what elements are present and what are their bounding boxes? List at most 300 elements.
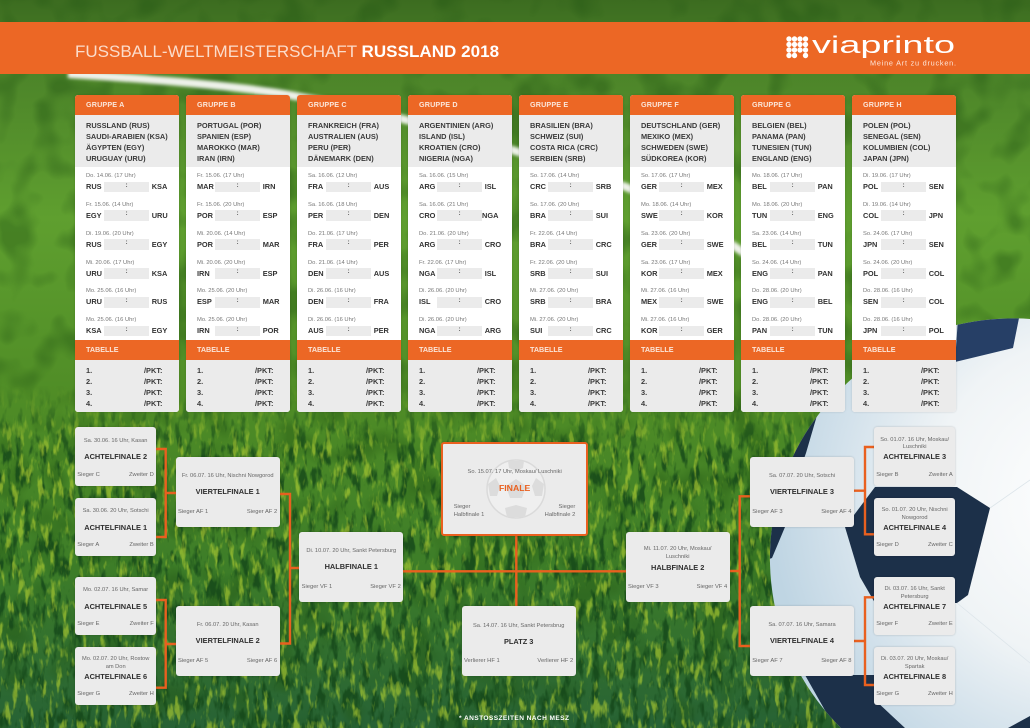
team list A: URUGUAY (URU) bbox=[86, 154, 146, 162]
panel: Gruppe C bbox=[297, 95, 401, 412]
table heading F bbox=[630, 340, 734, 360]
matches B bbox=[197, 173, 280, 336]
matches B: ESP bbox=[197, 297, 212, 306]
connector: AF2 and AF1 to VF1 bbox=[156, 449, 176, 537]
matches G: PAN bbox=[818, 268, 833, 278]
table F: /PKT: bbox=[699, 398, 717, 408]
card: Achtelfinale 8: Zweiter H bbox=[928, 691, 953, 697]
matches F: : bbox=[681, 269, 683, 275]
card: Achtelfinale 4 bbox=[874, 498, 955, 556]
team list F bbox=[630, 115, 734, 167]
team list B: SPANIEN (ESP) bbox=[197, 132, 251, 140]
table A bbox=[75, 360, 179, 412]
card: Finale bbox=[441, 442, 588, 536]
matches H: POL bbox=[929, 326, 944, 335]
team list E bbox=[519, 115, 623, 167]
team list E: SERBIEN (SRB) bbox=[530, 154, 585, 162]
matches C: PER bbox=[374, 326, 389, 335]
matches E bbox=[530, 173, 612, 336]
matches D bbox=[419, 173, 501, 336]
team list H: KOLUMBIEN (COL) bbox=[863, 142, 930, 152]
card: Achtelfinale 8: Sieger G bbox=[876, 691, 899, 697]
table F: 3. bbox=[641, 388, 647, 396]
matches F: Sa. 23.06. (17 Uhr) bbox=[641, 260, 690, 266]
team list A: RUSSLAND (RUS) bbox=[86, 120, 150, 130]
matches E: SUI bbox=[596, 211, 608, 220]
matches C: FRA bbox=[308, 182, 323, 191]
matches C: Di. 26.06. (16 Uhr) bbox=[308, 317, 356, 323]
team list H: JAPAN (JPN) bbox=[863, 154, 909, 162]
matches A: Mo. 25.06. (16 Uhr) bbox=[86, 288, 136, 294]
matches G: : bbox=[792, 269, 794, 275]
matches B: IRN bbox=[197, 268, 210, 278]
card: Platz 3: Verlierer HF 1 bbox=[464, 658, 500, 664]
matches F: GER bbox=[641, 182, 657, 191]
matches F: Mi. 27.06. (16 Uhr) bbox=[641, 317, 689, 323]
table heading H bbox=[852, 340, 956, 360]
connector: HF1 and HF2 with final and third place bbox=[403, 535, 626, 607]
matches H: : bbox=[903, 211, 905, 217]
heading: Gruppe A: GRUPPE A bbox=[86, 100, 124, 109]
matches C: Sa. 16.06. (12 Uhr) bbox=[308, 173, 357, 179]
logo: viaprinto: Meine Art zu drucken. bbox=[870, 58, 956, 68]
table E: 4. bbox=[530, 398, 536, 408]
matches H: So. 24.06. (17 Uhr) bbox=[863, 231, 912, 237]
matches E: : bbox=[570, 298, 572, 304]
card: Viertelfinale 2: Sieger AF 6 bbox=[247, 658, 277, 664]
heading: Gruppe G: GRUPPE G bbox=[752, 100, 791, 109]
table G: /PKT: bbox=[810, 366, 828, 374]
matches D: Di. 26.06. (20 Uhr) bbox=[419, 317, 467, 323]
matches H: COL bbox=[863, 211, 879, 220]
matches F: KOR bbox=[641, 268, 657, 278]
matches A: Mo. 25.06. (16 Uhr) bbox=[86, 317, 136, 323]
matches G: BEL bbox=[818, 297, 832, 306]
matches B: : bbox=[237, 183, 239, 189]
table G: /PKT: bbox=[810, 388, 828, 396]
table heading B bbox=[186, 340, 290, 360]
matches D: ISL bbox=[419, 297, 430, 306]
matches G: : bbox=[792, 183, 794, 189]
table E: 3. bbox=[530, 388, 536, 396]
matches H: : bbox=[903, 298, 905, 304]
team list E: SCHWEIZ (SUI) bbox=[530, 132, 583, 140]
team list F: MEXIKO (MEX) bbox=[641, 132, 693, 140]
matches E: : bbox=[570, 183, 572, 189]
matches E: Mi. 27.06. (20 Uhr) bbox=[530, 317, 578, 323]
table heading G bbox=[741, 340, 845, 360]
matches B: Mi. 20.06. (20 Uhr) bbox=[197, 260, 245, 266]
matches A: : bbox=[126, 327, 128, 333]
matches E: SRB bbox=[530, 297, 546, 306]
team list G: ENGLAND (ENG) bbox=[752, 154, 812, 162]
team list H: POLEN (POL) bbox=[863, 120, 911, 130]
matches B: Fr. 15.06. (20 Uhr) bbox=[197, 202, 244, 208]
card: Achtelfinale 2: ACHTELFINALE 2 bbox=[84, 452, 147, 461]
matches A: : bbox=[126, 298, 128, 304]
matches A: RUS bbox=[152, 297, 167, 306]
card: Achtelfinale 5: Mo. 02.07. 16 Uhr, Samar bbox=[83, 587, 148, 593]
card: Halbfinale 1 bbox=[299, 532, 403, 602]
card: Platz 3: Sa. 14.07. 16 Uhr, Sankt Petersbrug bbox=[473, 623, 564, 629]
heading: Gruppe D bbox=[408, 95, 512, 115]
card: Achtelfinale 4: Nowgorod bbox=[902, 515, 928, 521]
matches A: URU bbox=[152, 211, 168, 220]
heading: Gruppe F: GRUPPE F bbox=[641, 100, 679, 109]
matches G: PAN bbox=[818, 182, 833, 191]
team list B: PORTUGAL (POR) bbox=[197, 120, 261, 130]
matches A: URU bbox=[86, 297, 102, 306]
heading: Gruppe H: GRUPPE H bbox=[863, 100, 902, 109]
matches C: Di. 26.06. (16 Uhr) bbox=[308, 288, 356, 294]
matches G: BEL bbox=[752, 182, 767, 191]
matches G: : bbox=[792, 298, 794, 304]
card: Achtelfinale 6: Zweiter H bbox=[129, 691, 154, 697]
matches B: : bbox=[237, 211, 239, 217]
card: Achtelfinale 4: So. 01.07. 20 Uhr, Nischni bbox=[882, 507, 948, 513]
card: Achtelfinale 7: Zweiter E bbox=[928, 621, 953, 627]
matches G: BEL bbox=[752, 240, 767, 249]
matches D: ISL bbox=[485, 182, 496, 191]
table H: 4. bbox=[863, 398, 869, 408]
card: Achtelfinale 8: Di. 03.07. 20 Uhr, Moskau/ bbox=[881, 656, 948, 662]
table H: /PKT: bbox=[921, 398, 939, 408]
matches F: : bbox=[681, 240, 683, 246]
matches E: Mi. 27.06. (20 Uhr) bbox=[530, 288, 578, 294]
matches C: PER bbox=[308, 211, 323, 220]
matches A: Mi. 20.06. (17 Uhr) bbox=[86, 260, 134, 266]
table heading A bbox=[75, 340, 179, 360]
matches F: So. 17.06. (17 Uhr) bbox=[641, 173, 690, 179]
table F: 4. bbox=[641, 398, 647, 408]
matches H: POL bbox=[863, 182, 878, 191]
table heading D: TABELLE bbox=[419, 345, 452, 354]
matches C: DEN bbox=[308, 268, 324, 278]
matches B: : bbox=[237, 298, 239, 304]
card: Achtelfinale 4: Zweiter C bbox=[928, 542, 953, 548]
matches G: PAN bbox=[752, 326, 767, 335]
matches E: BRA bbox=[530, 240, 546, 249]
matches F: GER bbox=[641, 240, 657, 249]
table E bbox=[519, 360, 623, 412]
table A: 1. bbox=[86, 366, 92, 374]
card: Viertelfinale 2: Sieger AF 5 bbox=[178, 658, 208, 664]
matches B: MAR bbox=[263, 240, 280, 249]
heading: Gruppe A bbox=[75, 95, 179, 115]
table C: 4. bbox=[308, 398, 314, 408]
card: Achtelfinale 6: Sieger G bbox=[77, 691, 100, 697]
matches G bbox=[752, 173, 834, 336]
matches B: ESP bbox=[263, 211, 277, 220]
card: Viertelfinale 3 bbox=[750, 457, 854, 527]
matches H: : bbox=[903, 183, 905, 189]
connector: VF3 and VF4 to HF2 bbox=[730, 496, 750, 646]
table C: 3. bbox=[308, 388, 314, 396]
matches H: Di. 19.06. (14 Uhr) bbox=[863, 202, 911, 208]
table G: 3. bbox=[752, 388, 758, 396]
matches G: : bbox=[792, 327, 794, 333]
matches F: Mo. 18.06. (14 Uhr) bbox=[641, 202, 691, 208]
card: Achtelfinale 7 bbox=[874, 577, 955, 635]
team list C: AUSTRALIEN (AUS) bbox=[308, 132, 378, 140]
logo: viaprinto bbox=[786, 32, 956, 68]
card: Achtelfinale 2: Sieger C bbox=[77, 472, 100, 478]
matches H: SEN bbox=[929, 240, 944, 249]
matches E: SUI bbox=[596, 268, 608, 278]
matches F bbox=[641, 173, 724, 336]
heading: Gruppe C bbox=[297, 95, 401, 115]
card: Achtelfinale 7: Sieger F bbox=[876, 621, 898, 627]
card: Achtelfinale 6 bbox=[75, 647, 156, 705]
matches E: CRC bbox=[596, 240, 612, 249]
team list C bbox=[297, 115, 401, 167]
card: Viertelfinale 1: Fr. 06.07. 16 Uhr, Nischni Nowgorod bbox=[182, 473, 274, 479]
matches F: MEX bbox=[641, 297, 657, 306]
card: Platz 3: PLATZ 3 bbox=[504, 637, 533, 646]
panel: Gruppe B bbox=[186, 95, 290, 412]
card: Viertelfinale 2: Fr. 06.07. 20 Uhr, Kasan bbox=[197, 622, 259, 628]
matches D: : bbox=[459, 211, 461, 217]
table D: /PKT: bbox=[477, 388, 495, 396]
heading: Gruppe C: GRUPPE C bbox=[308, 100, 347, 109]
team list D bbox=[408, 115, 512, 167]
matches C: FRA bbox=[374, 297, 389, 306]
table H: 1. bbox=[863, 366, 869, 374]
matches B: IRN bbox=[263, 182, 275, 191]
matches F: : bbox=[681, 298, 683, 304]
table A: 3. bbox=[86, 388, 92, 396]
team list D: ISLAND (ISL) bbox=[419, 132, 465, 140]
matches D: : bbox=[459, 269, 461, 275]
table A: /PKT: bbox=[144, 388, 162, 396]
matches A: RUS bbox=[86, 240, 102, 249]
card: Halbfinale 2: Mi. 11.07. 20 Uhr, Moskau/ bbox=[644, 546, 711, 552]
card: Achtelfinale 6: ACHTELFINALE 6 bbox=[84, 672, 147, 681]
finale right team bbox=[545, 504, 576, 518]
table H bbox=[852, 360, 956, 412]
matches G: Mo. 18.06. (20 Uhr) bbox=[752, 202, 802, 208]
matches E: BRA bbox=[596, 297, 612, 306]
matches E: So. 17.06. (20 Uhr) bbox=[530, 202, 579, 208]
table F: /PKT: bbox=[699, 366, 717, 374]
table D: 1. bbox=[419, 366, 425, 374]
matches H: JPN bbox=[863, 326, 877, 335]
panel: Gruppe H bbox=[852, 95, 956, 412]
connector: VF1 and VF2 to HF1 bbox=[279, 494, 300, 644]
card: Achtelfinale 3: Luschniki bbox=[903, 444, 926, 450]
team list E: BRASILIEN (BRA) bbox=[530, 120, 593, 130]
team list G bbox=[741, 115, 845, 167]
matches E: CRC bbox=[596, 326, 612, 335]
card: Viertelfinale 3: Sieger AF 4 bbox=[821, 509, 852, 515]
matches G: ENG bbox=[752, 297, 768, 306]
table E: /PKT: bbox=[588, 388, 606, 396]
card: Halbfinale 2: Sieger VF 4 bbox=[697, 584, 727, 590]
matches F: MEX bbox=[707, 268, 723, 278]
matches E: SRB bbox=[596, 182, 611, 191]
matches E: SRB bbox=[530, 268, 546, 278]
matches F: Sa. 23.06. (20 Uhr) bbox=[641, 231, 690, 237]
card: Platz 3 bbox=[462, 606, 576, 676]
matches D: Sa. 16.06. (21 Uhr) bbox=[419, 202, 468, 208]
panel: Gruppe A bbox=[75, 95, 179, 412]
table heading G: TABELLE bbox=[752, 345, 785, 354]
table E: /PKT: bbox=[588, 366, 606, 374]
footnote: * ANSTOSSZEITEN NACH MESZ bbox=[459, 715, 569, 722]
matches H: Di. 19.06. (17 Uhr) bbox=[863, 173, 911, 179]
card: Achtelfinale 2 bbox=[75, 427, 156, 486]
team list H: SENEGAL (SEN) bbox=[863, 132, 921, 140]
card: Achtelfinale 7: Petersburg bbox=[901, 594, 929, 600]
team list D: NIGERIA (NGA) bbox=[419, 154, 473, 162]
card: Halbfinale 2: Luschniki bbox=[666, 554, 690, 560]
matches C: PER bbox=[374, 240, 389, 249]
panel: Gruppe F bbox=[630, 95, 734, 412]
matches G: TUN bbox=[818, 326, 833, 335]
card: Viertelfinale 1 bbox=[176, 457, 280, 527]
matches C: AUS bbox=[374, 268, 389, 278]
heading: Gruppe F bbox=[630, 95, 734, 115]
table H: /PKT: bbox=[921, 376, 939, 386]
connector: AF3 and AF4 to VF3 bbox=[854, 447, 874, 534]
finale date: So. 15.07. 17 Uhr, Moskau/ Luschniki bbox=[468, 469, 562, 475]
team list F: SÜDKOREA (KOR) bbox=[641, 154, 706, 162]
matches C: : bbox=[348, 183, 350, 189]
table G: 1. bbox=[752, 366, 758, 374]
team list A: ÄGYPTEN (EGY) bbox=[86, 142, 144, 152]
title: FUSSBALL-WELTMEISTERSCHAFT RUSSLAND 2018 bbox=[75, 42, 499, 61]
matches E: Fr. 22.06. (14 Uhr) bbox=[530, 231, 577, 237]
finale left team bbox=[454, 504, 484, 518]
card: Viertelfinale 2: VIERTELFINALE 2 bbox=[196, 636, 260, 645]
table E: 2. bbox=[530, 376, 536, 386]
card: Achtelfinale 5: Sieger E bbox=[77, 621, 100, 627]
table H: 2. bbox=[863, 376, 869, 386]
matches A: KSA bbox=[86, 326, 102, 335]
card: Achtelfinale 6: Mo. 02.07. 20 Uhr, Rostow bbox=[82, 656, 149, 662]
table A: /PKT: bbox=[144, 376, 162, 386]
matches A: : bbox=[126, 240, 128, 246]
matches G: TUN bbox=[752, 211, 767, 220]
matches D: ISL bbox=[485, 268, 496, 278]
table F bbox=[630, 360, 734, 412]
heading: Gruppe G bbox=[741, 95, 845, 115]
finale left team: Sieger bbox=[454, 504, 470, 510]
card: Achtelfinale 1 bbox=[75, 498, 156, 556]
card: Achtelfinale 3 bbox=[874, 427, 955, 486]
matches C: : bbox=[348, 211, 350, 217]
matches B: MAR bbox=[263, 297, 280, 306]
card: Achtelfinale 5: Zweiter F bbox=[130, 621, 154, 627]
team list G: BELGIEN (BEL) bbox=[752, 120, 807, 130]
card: Achtelfinale 3: Zweiter A bbox=[929, 472, 953, 478]
table G: 4. bbox=[752, 398, 758, 408]
team list G: PANAMA (PAN) bbox=[752, 132, 806, 140]
matches C: Do. 21.06. (14 Uhr) bbox=[308, 260, 358, 266]
heading: Gruppe E bbox=[519, 95, 623, 115]
matches E: So. 17.06. (14 Uhr) bbox=[530, 173, 579, 179]
card: Achtelfinale 1: Sa. 30.06. 20 Uhr, Sotschi bbox=[83, 508, 149, 514]
table D bbox=[408, 360, 512, 412]
matches A: Fr. 15.06. (14 Uhr) bbox=[86, 202, 133, 208]
matches F: GER bbox=[707, 326, 723, 335]
matches H: POL bbox=[863, 268, 878, 278]
panel: Gruppe E bbox=[519, 95, 623, 412]
table A: /PKT: bbox=[144, 398, 162, 408]
matches E: SUI bbox=[530, 326, 542, 335]
matches H: SEN bbox=[863, 297, 878, 306]
matches B: Mo. 25.06. (20 Uhr) bbox=[197, 317, 247, 323]
matches D: Do. 21.06. (20 Uhr) bbox=[419, 231, 469, 237]
matches A: EGY bbox=[152, 240, 167, 249]
matches A: KSA bbox=[152, 182, 167, 191]
matches C: : bbox=[348, 269, 350, 275]
card: Halbfinale 1: Di. 10.07. 20 Uhr, Sankt Petersburg bbox=[306, 548, 396, 554]
matches B: : bbox=[237, 240, 239, 246]
card: Viertelfinale 4: Sieger AF 7 bbox=[752, 658, 783, 664]
matches F: : bbox=[681, 183, 683, 189]
matches G: : bbox=[792, 211, 794, 217]
table D: /PKT: bbox=[477, 366, 495, 374]
table E: /PKT: bbox=[588, 398, 606, 408]
matches C: FRA bbox=[308, 240, 323, 249]
matches A: EGY bbox=[86, 211, 102, 220]
table F: /PKT: bbox=[699, 376, 717, 386]
connector: AF5 and AF6 to VF2 bbox=[156, 600, 176, 688]
card: Achtelfinale 3: So. 01.07. 16 Uhr, Moskau/ bbox=[880, 437, 949, 443]
matches C: DEN bbox=[308, 297, 324, 306]
card: Achtelfinale 6: am Don bbox=[106, 664, 126, 670]
matches B: : bbox=[237, 327, 239, 333]
matches A: EGY bbox=[152, 326, 167, 335]
matches E: : bbox=[570, 240, 572, 246]
matches A: URU bbox=[86, 268, 102, 278]
team list B: IRAN (IRN) bbox=[197, 154, 235, 162]
matches G: Mo. 18.06. (17 Uhr) bbox=[752, 173, 802, 179]
finale right team: Sieger bbox=[559, 504, 575, 510]
matches A: Di. 19.06. (20 Uhr) bbox=[86, 231, 134, 237]
matches A bbox=[86, 173, 168, 336]
matches G: Sa. 23.06. (14 Uhr) bbox=[752, 231, 801, 237]
matches D: CRO bbox=[419, 211, 435, 220]
card: Halbfinale 1: Sieger VF 1 bbox=[302, 584, 332, 590]
matches H: JPN bbox=[863, 240, 877, 249]
card: Viertelfinale 4 bbox=[750, 606, 854, 676]
table heading A: TABELLE bbox=[86, 345, 119, 354]
matches C bbox=[308, 173, 389, 336]
matches D: Di. 26.06. (20 Uhr) bbox=[419, 288, 467, 294]
table A: /PKT: bbox=[144, 366, 162, 374]
matches H: : bbox=[903, 327, 905, 333]
matches H: SEN bbox=[929, 182, 944, 191]
matches A: Do. 14.06. (17 Uhr) bbox=[86, 173, 136, 179]
matches H: : bbox=[903, 240, 905, 246]
table D: /PKT: bbox=[477, 376, 495, 386]
matches F: : bbox=[681, 211, 683, 217]
table H: /PKT: bbox=[921, 366, 939, 374]
card: Viertelfinale 4: VIERTELFINALE 4 bbox=[770, 636, 834, 645]
matches E: Fr. 22.06. (20 Uhr) bbox=[530, 260, 577, 266]
table D: /PKT: bbox=[477, 398, 495, 408]
matches H: COL bbox=[929, 268, 944, 278]
table G bbox=[741, 360, 845, 412]
table B bbox=[186, 360, 290, 412]
table B: 4. bbox=[197, 398, 203, 408]
heading: Gruppe E: GRUPPE E bbox=[530, 100, 568, 109]
card: Achtelfinale 5: ACHTELFINALE 5 bbox=[84, 602, 147, 611]
matches D: : bbox=[459, 183, 461, 189]
heading: Gruppe D: GRUPPE D bbox=[419, 100, 458, 109]
